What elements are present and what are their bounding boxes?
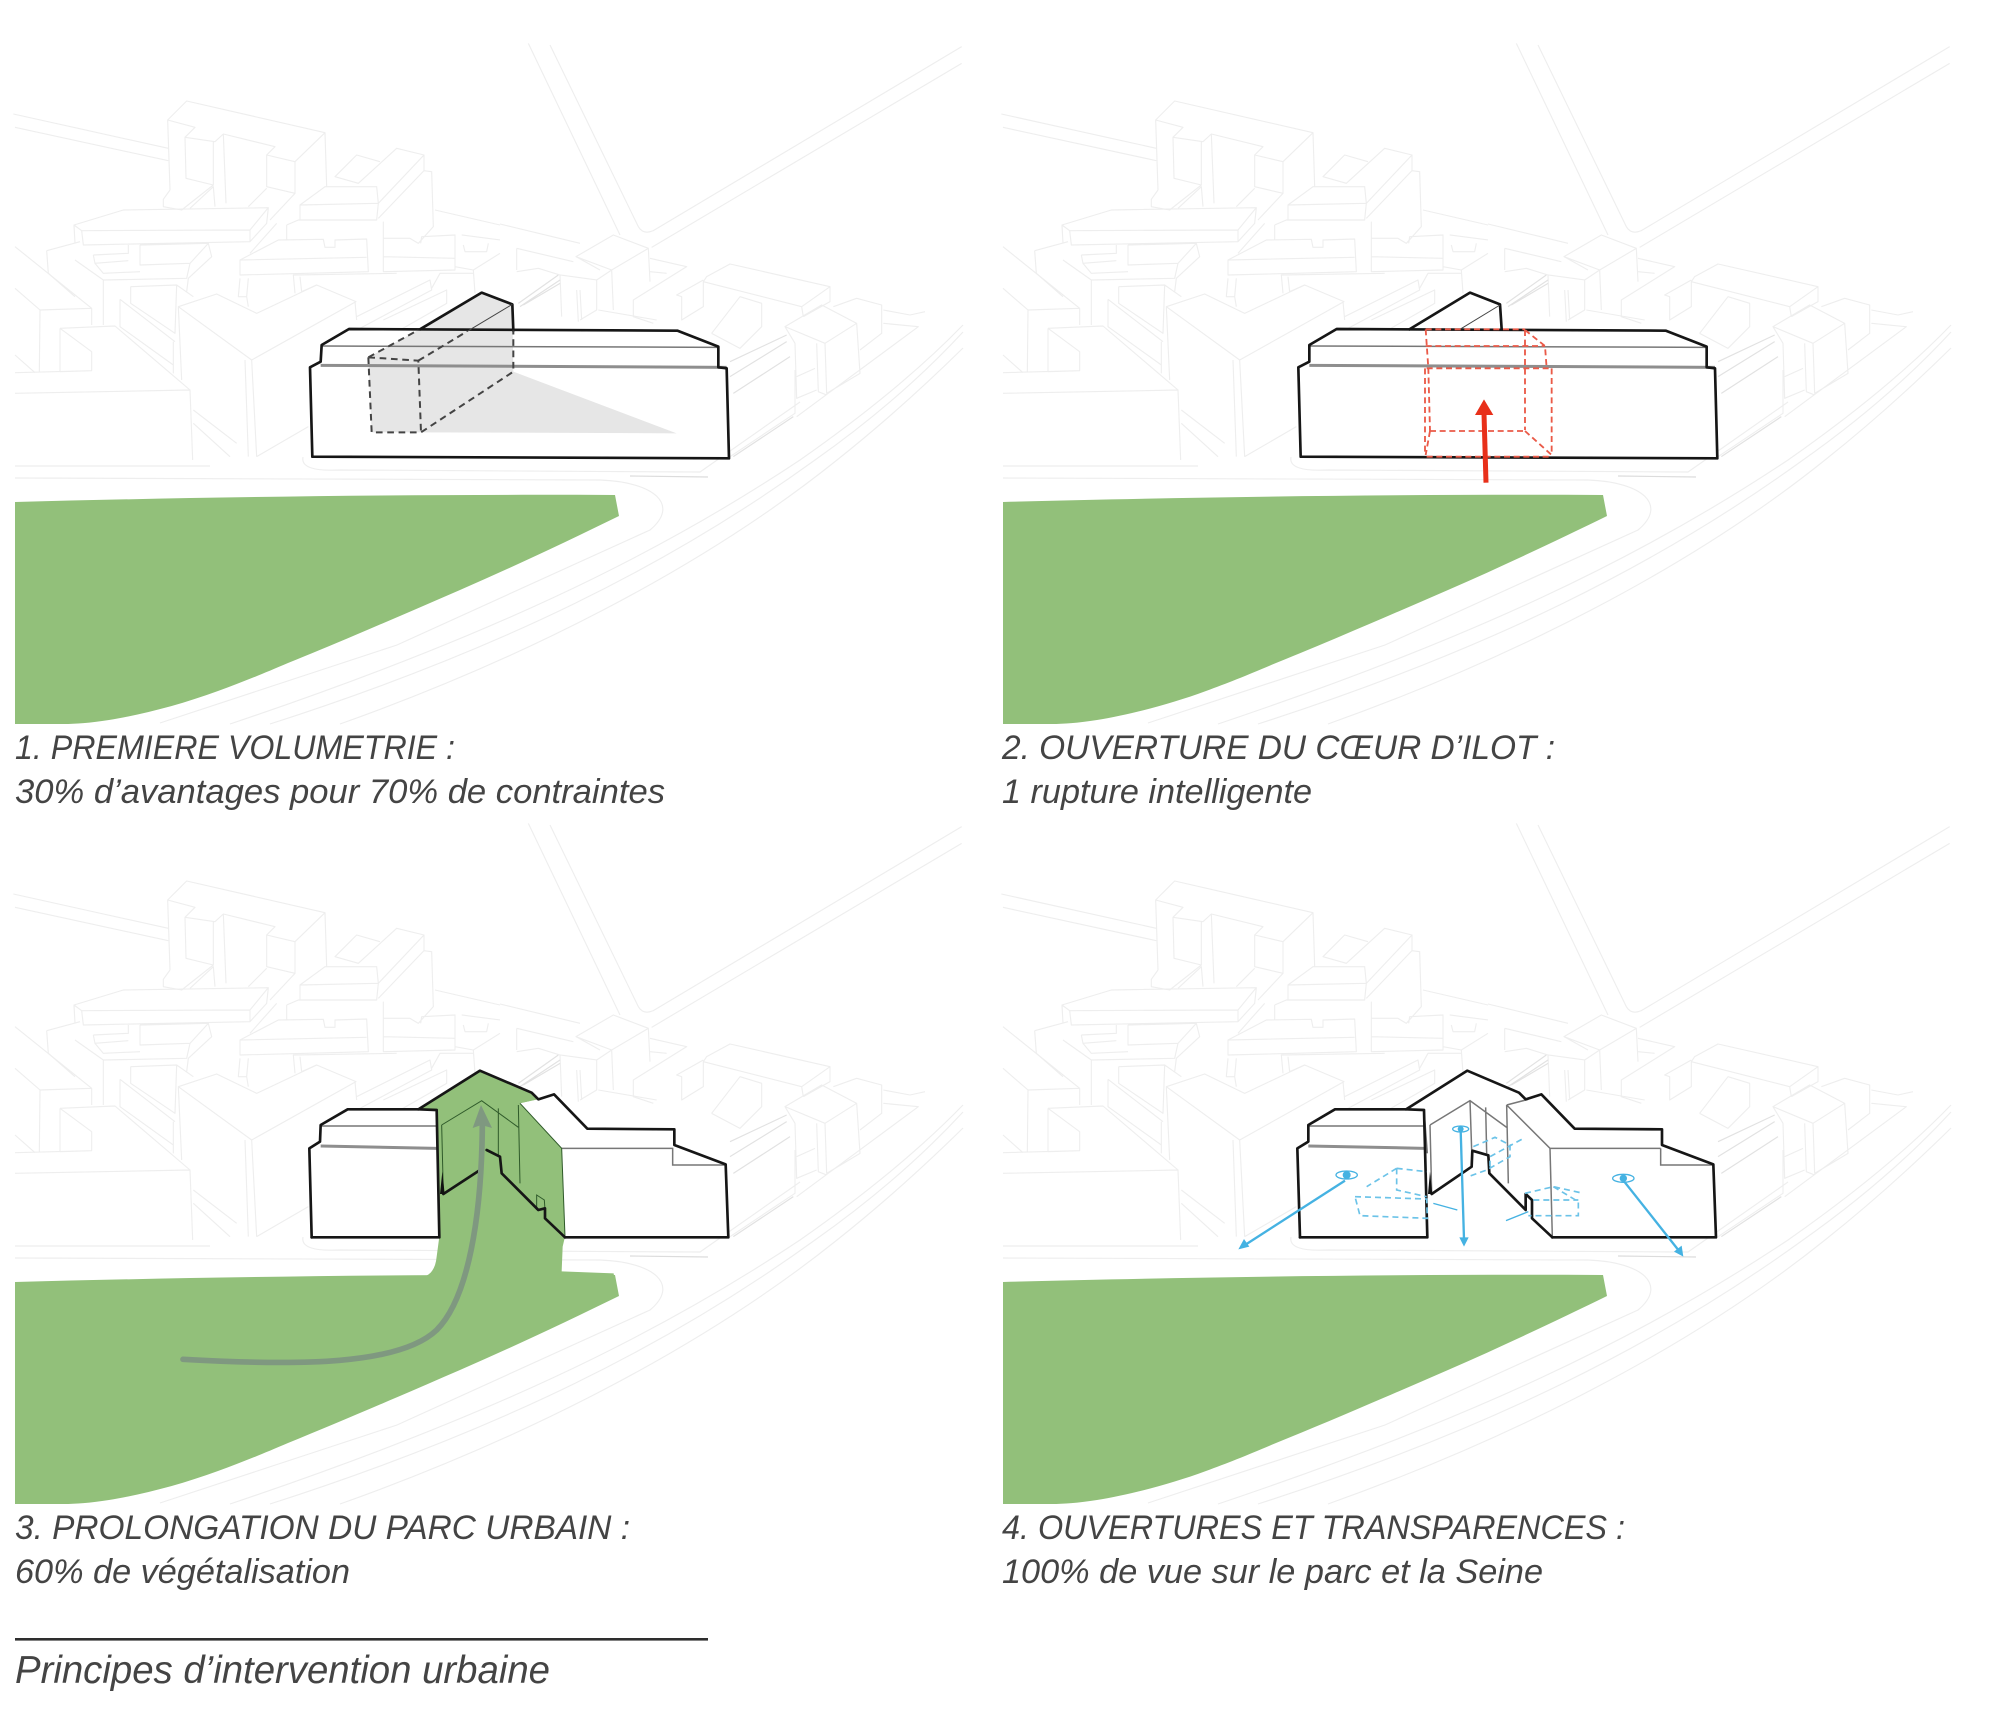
footer title with rule: Principes d’intervention urbaine	[15, 1649, 550, 1692]
panel 4: ouvertures et transparences	[1001, 823, 1951, 1591]
eye icons	[1336, 1126, 1634, 1182]
building volume with dashed block	[310, 293, 729, 458]
context city lines	[13, 823, 963, 1504]
caption 1: 1. PREMIERE VOLUMETRIE :	[15, 729, 455, 767]
panel 2: ouverture du coeur d'ilot	[1001, 43, 1951, 811]
caption 1	[15, 729, 665, 811]
green park	[1003, 1275, 1607, 1504]
context city lines	[1001, 43, 1951, 724]
caption 2	[1001, 729, 1555, 811]
caption 3: 60% de végétalisation	[15, 1553, 350, 1591]
red arrow	[1475, 399, 1493, 483]
grey path arrow through the park	[183, 1105, 492, 1363]
building with open courtyard	[1297, 1071, 1716, 1237]
caption 4: 4. OUVERTURES ET TRANSPARENCES :	[1002, 1509, 1625, 1547]
green park	[15, 1275, 619, 1504]
caption 2: 1 rupture intelligente	[1002, 773, 1312, 811]
caption 1: 30% d’avantages pour 70% de contraintes	[15, 773, 665, 811]
caption 4	[1002, 1509, 1625, 1591]
caption 3: 3. PROLONGATION DU PARC URBAIN :	[15, 1509, 630, 1547]
panel 1: premiere volumetrie	[13, 43, 963, 811]
context city lines	[13, 43, 963, 724]
green park	[1003, 495, 1607, 724]
panel 3: prolongation du parc urbain	[13, 823, 963, 1591]
green park	[15, 495, 619, 724]
caption 4: 100% de vue sur le parc et la Seine	[1002, 1553, 1543, 1591]
building with red dashed opening	[1298, 293, 1717, 458]
caption 2: 2. OUVERTURE DU CŒUR D’ILOT :	[1001, 729, 1555, 767]
building split by green corridor	[309, 1071, 728, 1330]
blue view arrows and dashed transparencies	[1238, 1126, 1683, 1257]
context city lines	[1001, 823, 1951, 1504]
caption 3	[15, 1509, 630, 1591]
